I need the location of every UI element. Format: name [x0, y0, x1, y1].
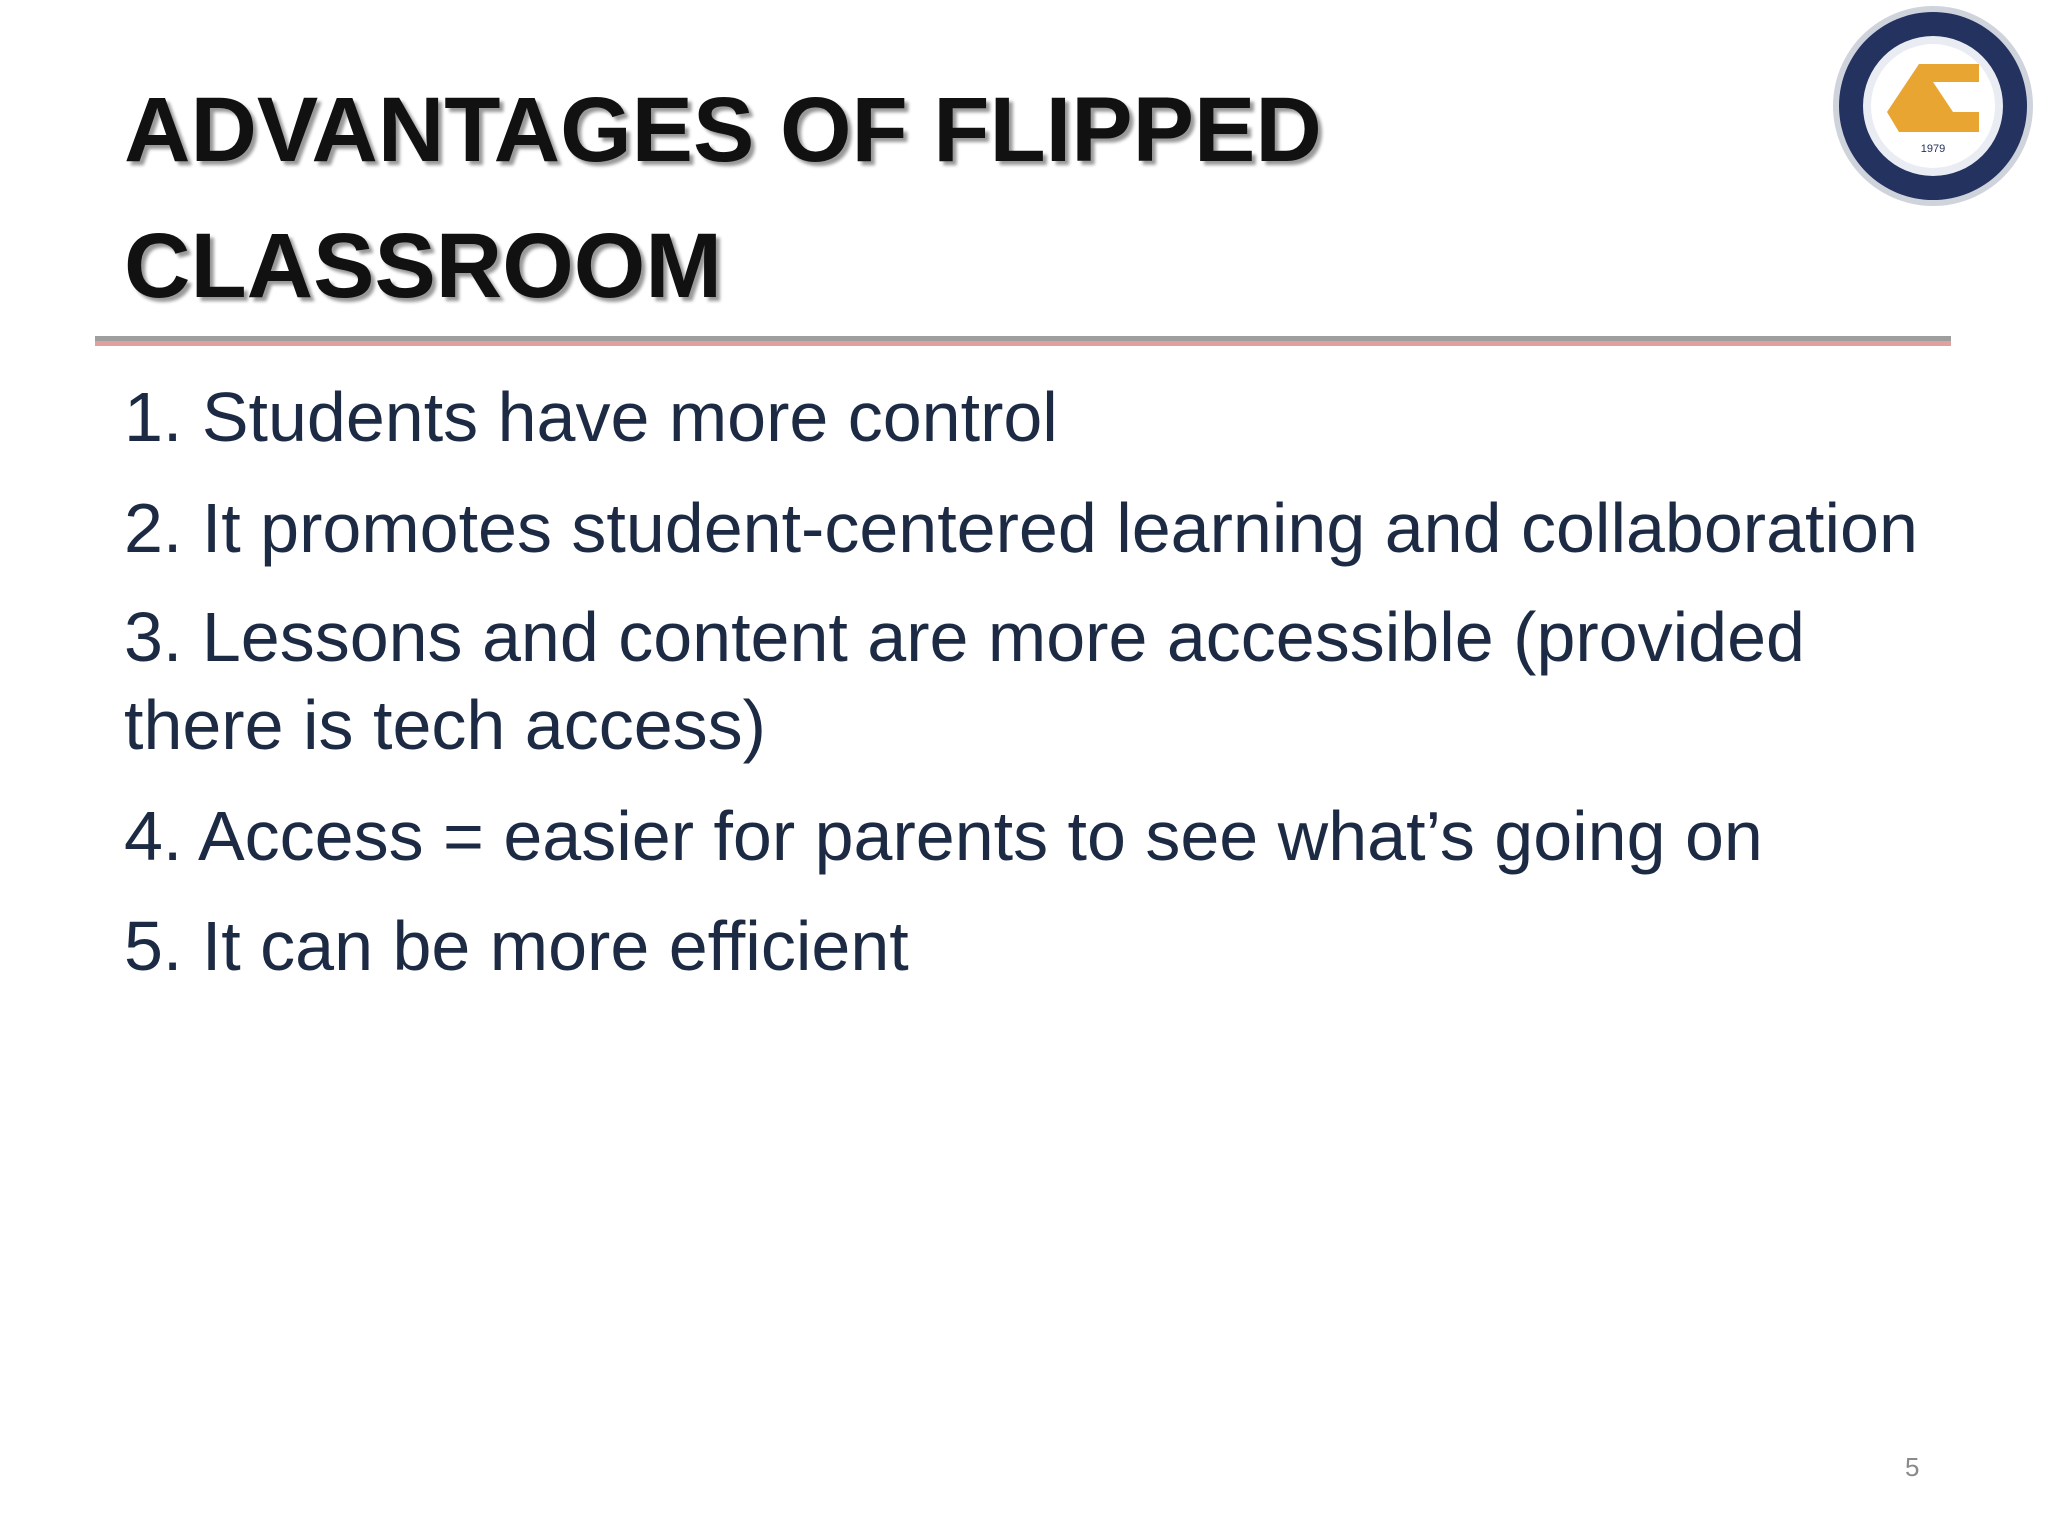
bullet list: there is tech access) [124, 686, 766, 764]
bullet list: 5. It can be more efficient [124, 907, 909, 985]
bullet list [124, 378, 1918, 985]
bullet list: 4. Access = easier for parents to see what’s going on [124, 797, 1763, 875]
logo [1833, 6, 2033, 206]
title: CLASSROOM [124, 215, 722, 317]
bullet list: 3. Lessons and content are more accessible (provided [124, 598, 1805, 676]
page number: 5 [1905, 1452, 1919, 1482]
title: ADVANTAGES OF FLIPPED [124, 79, 1322, 181]
title [124, 79, 1324, 317]
bullet list: 1. Students have more control [124, 378, 1058, 456]
divider rule [95, 336, 1951, 346]
logo: 1979 [1921, 143, 1945, 155]
bullet list: 2. It promotes student-centered learning and collaboration [124, 489, 1918, 567]
